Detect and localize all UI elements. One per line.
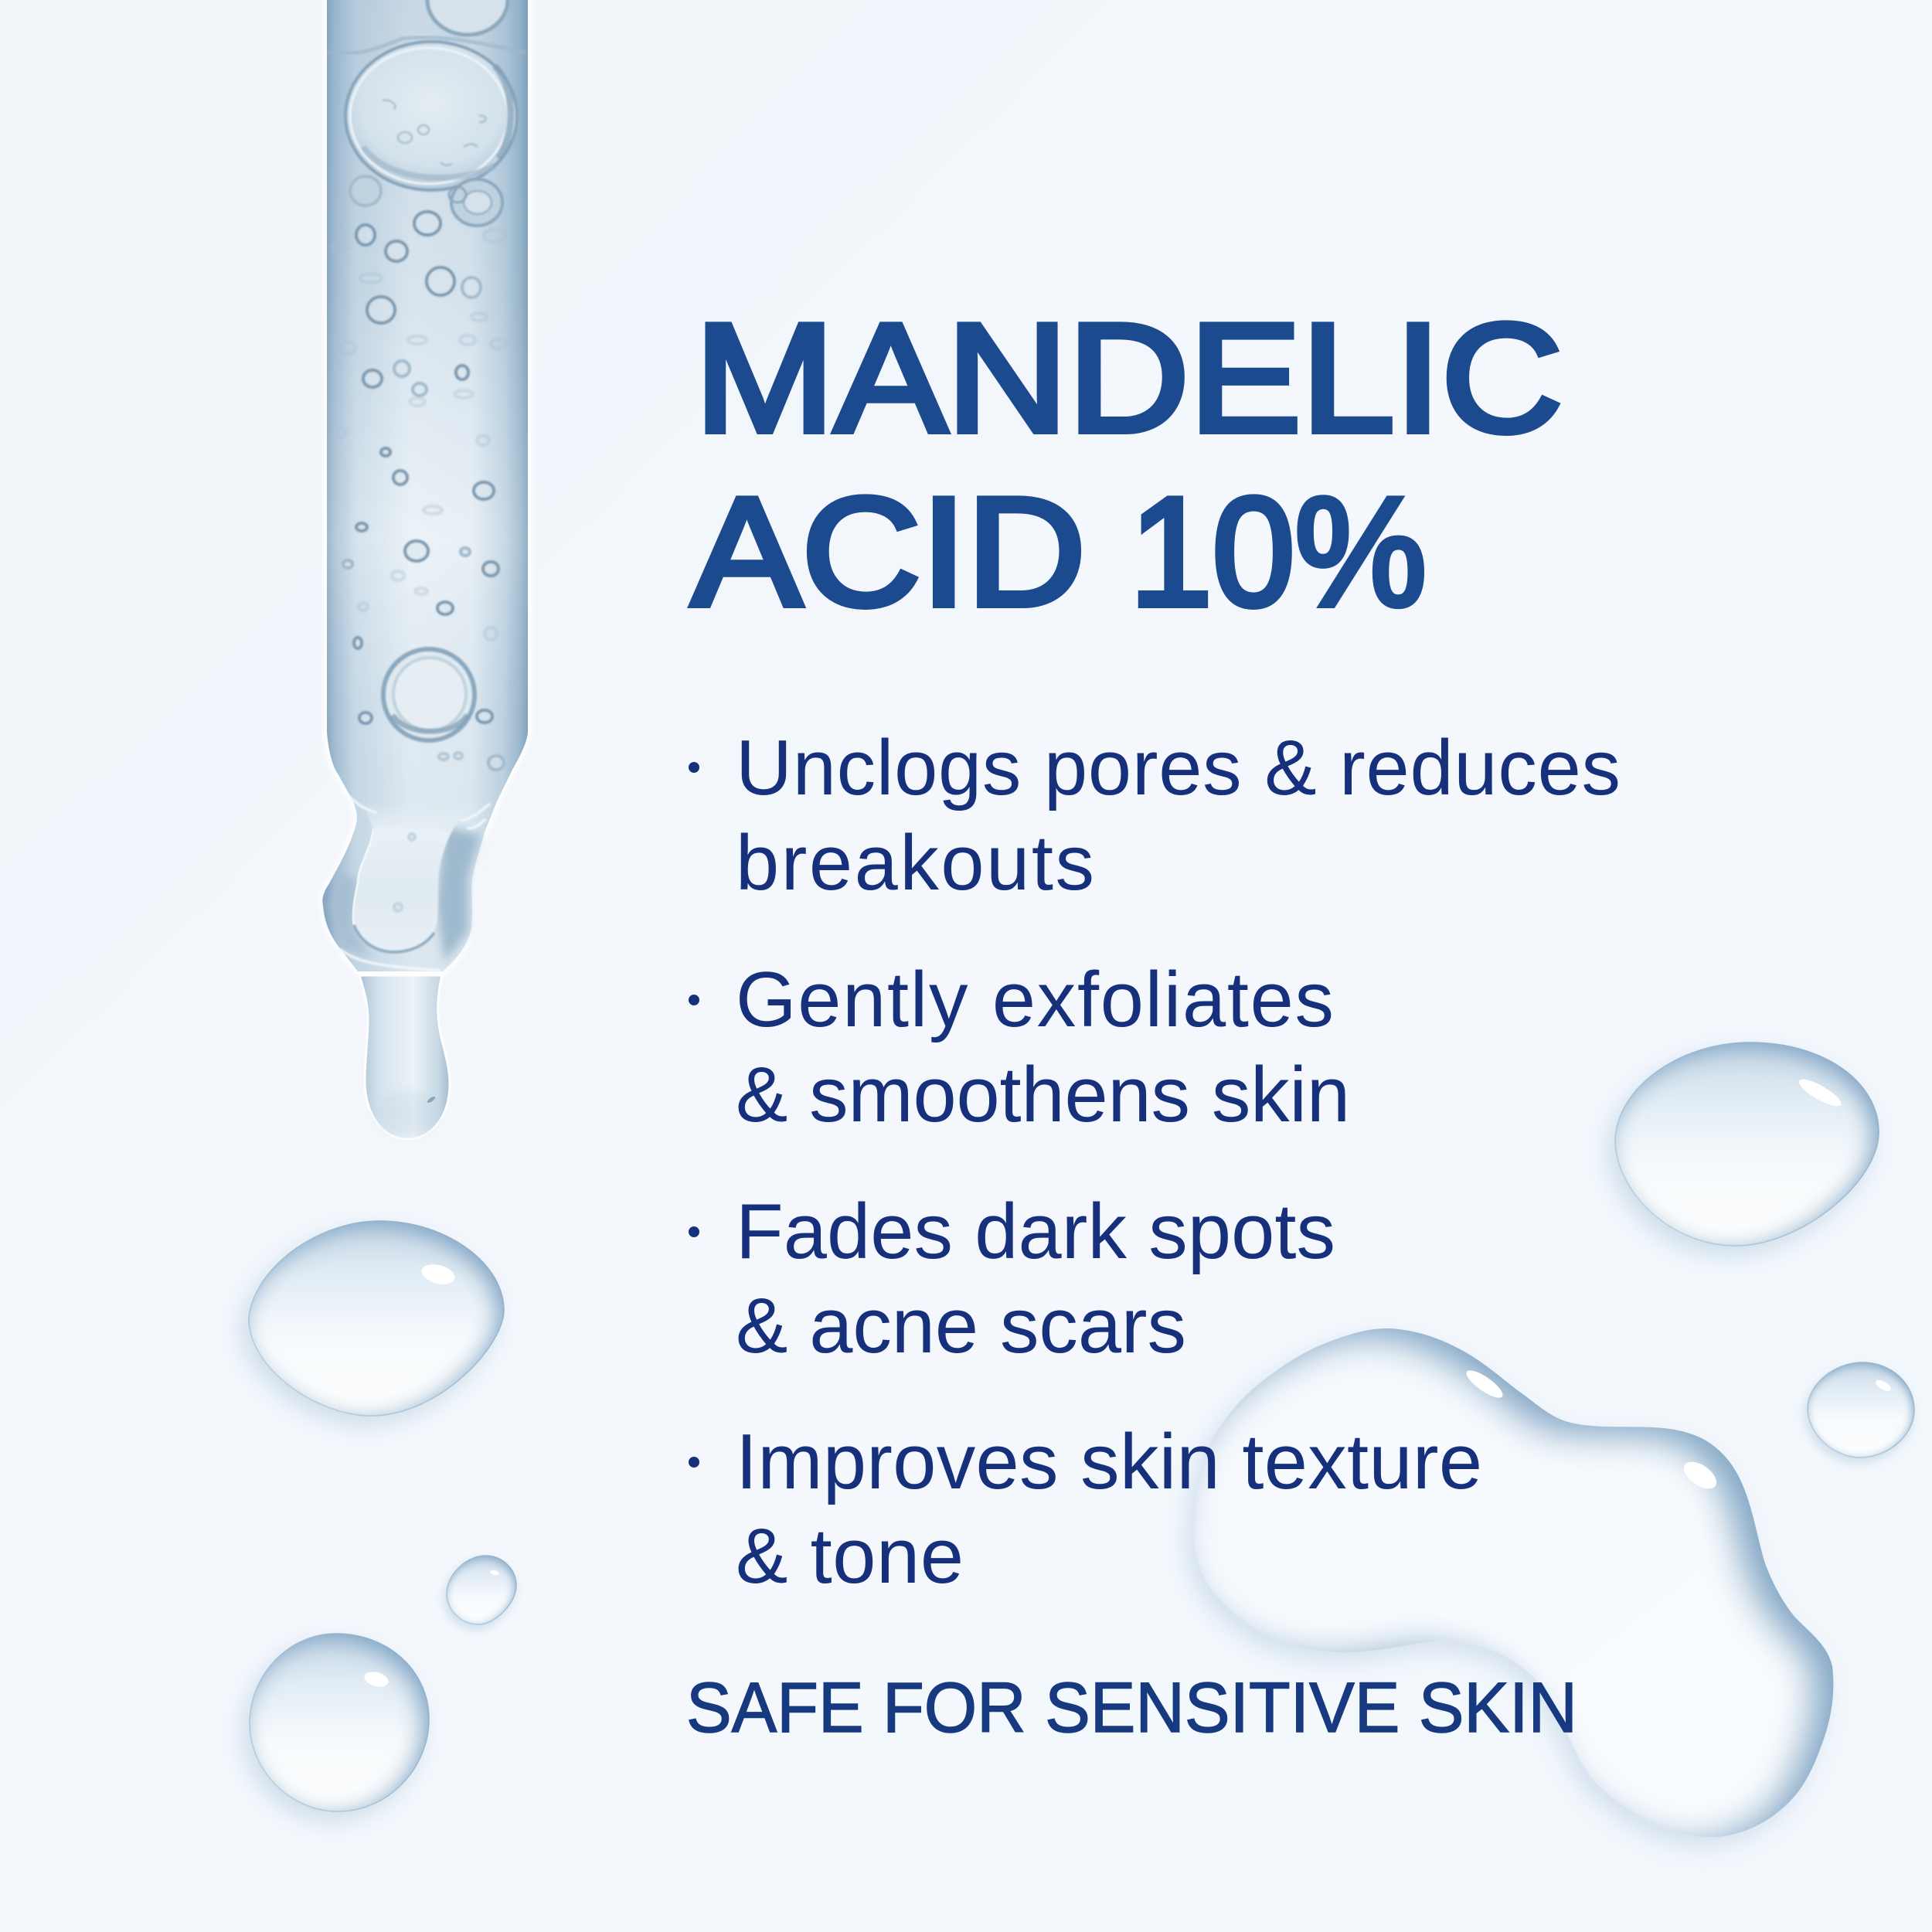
benefit: unclogs pores: breakouts [736,820,1094,906]
large upper bubble [345,42,517,190]
small ring bubbles [343,176,504,911]
pipette with serum [322,0,528,1139]
water drop: upper right [1615,1043,1879,1246]
benefit: texture and tone: Improves skin texture [736,1419,1482,1505]
faint micro bubbles [332,230,518,687]
benefit: exfoliates: & smoothens skin [736,1052,1350,1138]
benefit: texture and tone: & tone [736,1513,964,1600]
benefit: exfoliates [689,957,1350,1138]
benefit: unclogs pores: Unclogs pores & reduces [736,725,1621,811]
neck glass wrinkles [340,796,490,971]
benefit: unclogs pores [689,725,1621,906]
pipette vertical shading [322,0,528,971]
pipette halo [322,0,528,971]
lower ring bubble [383,649,474,740]
benefit: fades dark spots [689,1189,1335,1369]
water drop: small right [1808,1362,1914,1458]
hanging droplet [359,975,450,1139]
benefit: texture and tone [689,1419,1482,1600]
benefit: fades dark spots: Fades dark spots [736,1189,1335,1275]
title: MANDELIC [695,292,1563,464]
title [692,292,1563,638]
water drop: tiny left [447,1556,516,1624]
top partial bubble [427,0,508,35]
neck side shading [328,827,481,962]
neck inner lobe [353,804,479,952]
water drop: lower left [250,1634,429,1811]
benefit: exfoliates: Gently exfoliates [736,957,1334,1043]
pipette body [322,0,528,971]
water drop: upper left [249,1221,504,1416]
clustered bubble [449,179,502,226]
title: ACID [692,466,1086,638]
glass collar seam [328,37,526,53]
safety statement: SAFE FOR SENSITIVE SKIN [686,1668,1577,1747]
benefit: fades dark spots: & acne scars [736,1283,1186,1369]
title: 10% [1130,466,1427,638]
serum puddle [1194,1328,1833,1837]
